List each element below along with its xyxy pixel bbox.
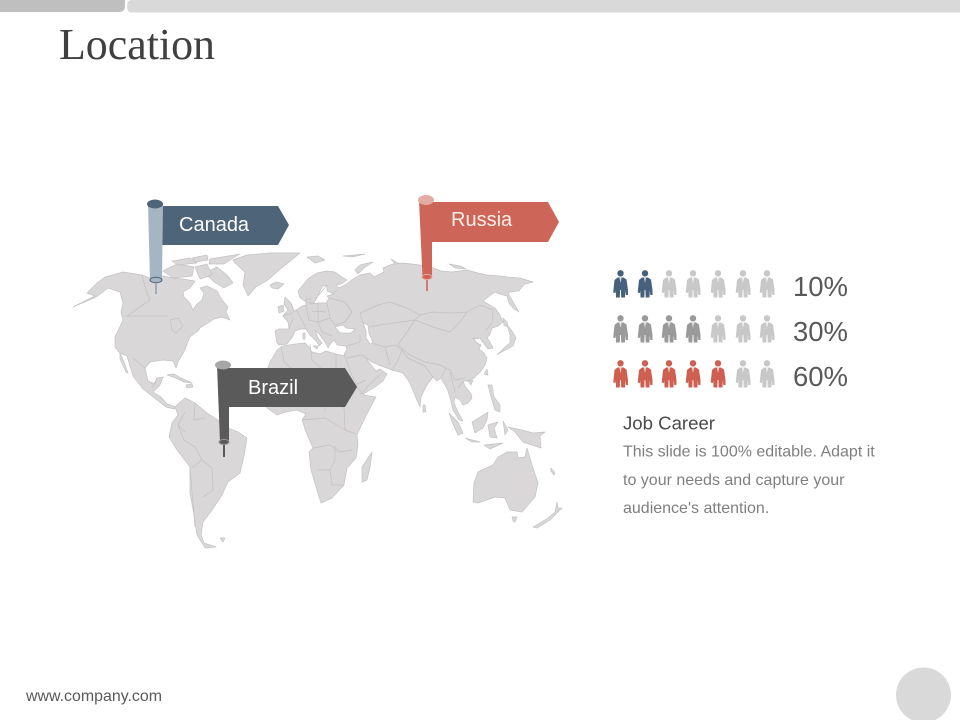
island: Baja California — [120, 353, 128, 373]
needle: Brazil — [223, 445, 225, 457]
Mediterranean islands — [303, 333, 318, 349]
world map — [73, 253, 562, 548]
island: Madagascar — [362, 452, 372, 482]
needle: Canada — [155, 283, 157, 294]
banner: Russia — [419, 200, 559, 277]
flag: Canada — [147, 200, 289, 294]
pictogram row: 60% — [613, 360, 774, 388]
pole base: Brazil — [219, 439, 229, 445]
islands: Japan, Taiwan, Hainan — [468, 318, 516, 385]
continent: Australia — [473, 448, 538, 512]
pole: Canada — [148, 204, 163, 280]
Canadian Arctic islands — [163, 254, 240, 288]
pole cap: Brazil — [215, 360, 231, 370]
pole base: Russia — [422, 274, 432, 280]
top bar: left segment — [0, 0, 125, 12]
description: to your needs and capture your — [623, 472, 845, 489]
British Isles — [278, 297, 295, 318]
pole cap: Canada — [147, 200, 163, 208]
flag: Russia — [418, 195, 559, 291]
pole cap: Russia — [418, 195, 434, 205]
pole base: Canada — [150, 277, 162, 283]
footer url: www.company.com — [25, 688, 162, 705]
subheading: Job Career — [623, 414, 715, 434]
label: Brazil: Brazil — [248, 377, 298, 399]
sea: Caspian Sea — [363, 323, 373, 344]
pictogram row: 10% — [613, 270, 774, 298]
percentage: 60%: 60% — [793, 361, 848, 392]
sea: Black Sea — [335, 325, 355, 333]
label: Russia: Russia — [451, 209, 513, 231]
Greenland — [233, 253, 300, 296]
country borders — [127, 275, 493, 527]
banner: Brazil — [217, 365, 357, 442]
Arctic islands of Eurasia — [307, 254, 466, 274]
island: Tierra del Fuego — [220, 538, 225, 542]
islands: Southeast Asia — [423, 385, 545, 449]
continent: Eurasia — [275, 263, 533, 421]
description — [623, 444, 875, 517]
continent: Africa — [262, 343, 376, 503]
needle: Russia — [426, 280, 428, 291]
pictogram row: 30% — [613, 315, 774, 342]
title: Location — [59, 20, 215, 69]
description: audience's attention. — [623, 500, 769, 517]
text block: job career — [623, 414, 875, 517]
top bar: right segment — [127, 0, 960, 12]
island: Hispaniola — [186, 384, 193, 388]
percentage: 30%: 30% — [793, 316, 848, 347]
island: Cuba — [167, 374, 192, 383]
Iceland — [270, 282, 284, 289]
banner: Canada — [161, 206, 289, 245]
islands: Tasmania and New Zealand — [512, 468, 562, 528]
flag: Brazil — [215, 360, 357, 457]
continent: South America — [169, 398, 247, 548]
footer circle — [896, 668, 951, 720]
label: Canada: Canada — [179, 214, 250, 236]
percentage: 10%: 10% — [793, 271, 848, 302]
continent: North America — [73, 272, 230, 409]
description: This slide is 100% editable. Adapt it — [623, 444, 875, 460]
